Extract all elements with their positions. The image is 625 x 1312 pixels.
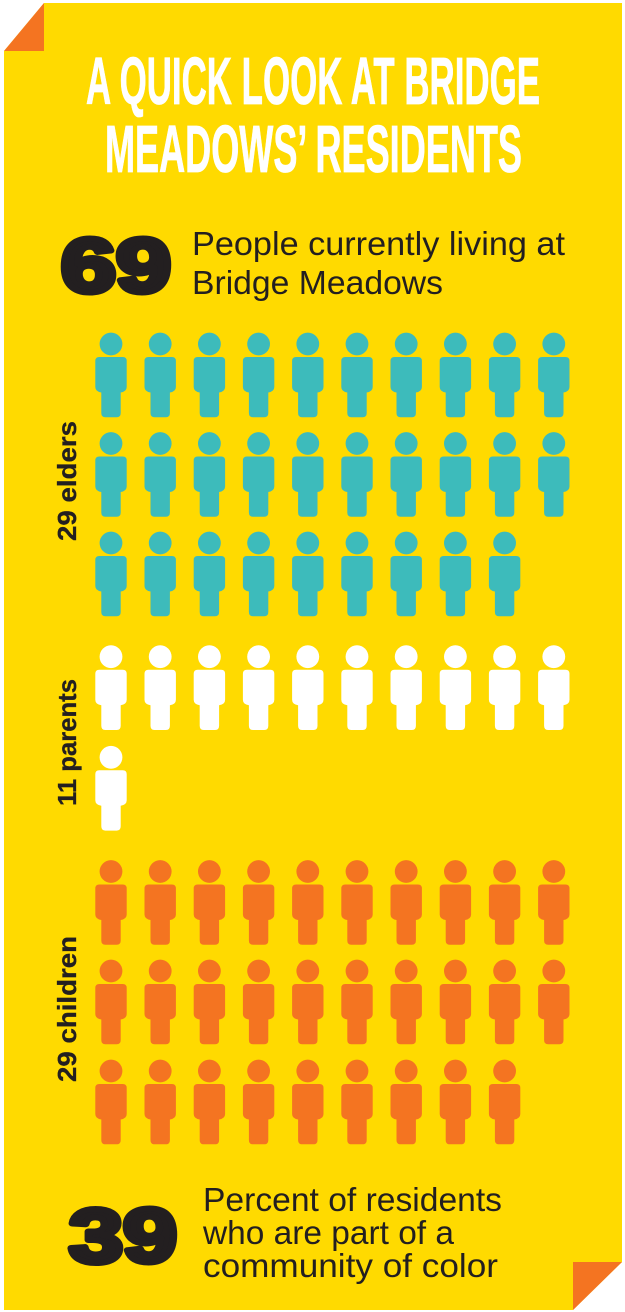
pictogram: 29 children xyxy=(95,860,570,1144)
label: 29 elders: 29 elders xyxy=(52,421,82,541)
text: people currently living: People currently living at xyxy=(192,225,565,262)
text: percent of residents xyxy=(202,1181,502,1284)
label: 11 parents: 11 parents xyxy=(52,679,82,806)
text: people currently living xyxy=(192,225,565,301)
text: percent of residents: Percent of residents xyxy=(203,1181,502,1218)
text: percent of residents: who are part of a xyxy=(202,1214,455,1251)
fold: bottom-right orange corner xyxy=(573,1262,622,1310)
title xyxy=(86,44,540,187)
text: people currently living: Bridge Meadows xyxy=(192,264,443,301)
text: percent of residents: community of color xyxy=(203,1247,498,1284)
big number: 69: 69 xyxy=(61,224,171,309)
fold: top-left orange corner xyxy=(4,3,44,51)
pictogram: 29 elders xyxy=(95,333,570,616)
big number: 39: 39 xyxy=(69,1194,177,1279)
pictogram: 11 parents xyxy=(95,645,570,831)
label: 29 children: 29 children xyxy=(52,936,82,1082)
